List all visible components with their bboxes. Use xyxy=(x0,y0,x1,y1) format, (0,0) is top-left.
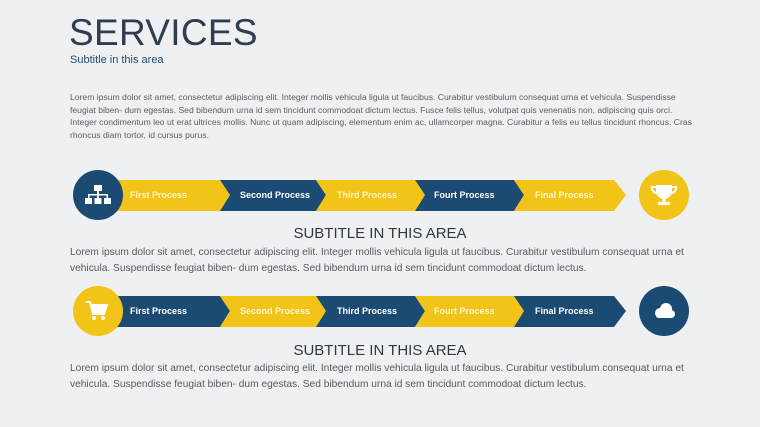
subtitle 2: SUBTITLE IN THIS AREA xyxy=(293,342,467,359)
intro paragraph: Lorem ipsum dolor sit amet, consectetur adipiscing elit. Integer mollis vehicula ligula ut faucibus. Curabitur vestibulum consequat urna et vehicula. Suspendisse feugiat biben- dum egestas. Sed bibendum urna id sem tincidunt commodoat dictum lectus. Fusce felis tellus, volutpat quis venenatis non, adipiscing quis orci. Integer condimentum leo ut erat ultrices mollis. Nunc ut quam adipiscing, elementum enim ac, ullamcorper magna. Curabitur a felis eu tellus tincidunt rhoncus. Cras rhoncus diam tortor, id cursus purus. xyxy=(70,92,692,140)
process row 1: First Process xyxy=(130,190,187,200)
process row 1: Fourt Process xyxy=(434,190,495,200)
subtitle 1: SUBTITLE IN THIS AREA xyxy=(293,225,467,242)
process row 2: Final Process xyxy=(535,306,594,316)
process row 2: Second Process xyxy=(240,306,310,316)
process row 2: First Process xyxy=(130,306,187,316)
process row 2: Fourt Process xyxy=(434,306,495,316)
process row 1: Second Process xyxy=(240,190,310,200)
process row 1 xyxy=(73,170,689,220)
body text 1: Lorem ipsum dolor sit amet, consectetur adipiscing elit. Integer mollis vehicula ligula ut faucibus. Curabitur vestibulum consequat urna et vehicula. Suspendisse feugiat biben- dum egestas. Sed bibendum urna id sem tincidunt commodoat dictum lectus. xyxy=(70,247,684,274)
process row 2 xyxy=(73,286,689,336)
process row 2: Third Process xyxy=(337,306,397,316)
process row 1: Third Process xyxy=(337,190,397,200)
title: SERVICES xyxy=(69,12,258,53)
process row 1: Final Process xyxy=(535,190,594,200)
subtitle: Subtitle in this area xyxy=(70,54,164,66)
body text 2: Lorem ipsum dolor sit amet, consectetur adipiscing elit. Integer mollis vehicula ligula ut faucibus. Curabitur vestibulum consequat urna et vehicula. Suspendisse feugiat biben- dum egestas. Sed bibendum urna id sem tincidunt commodoat dictum lectus. xyxy=(70,363,684,390)
